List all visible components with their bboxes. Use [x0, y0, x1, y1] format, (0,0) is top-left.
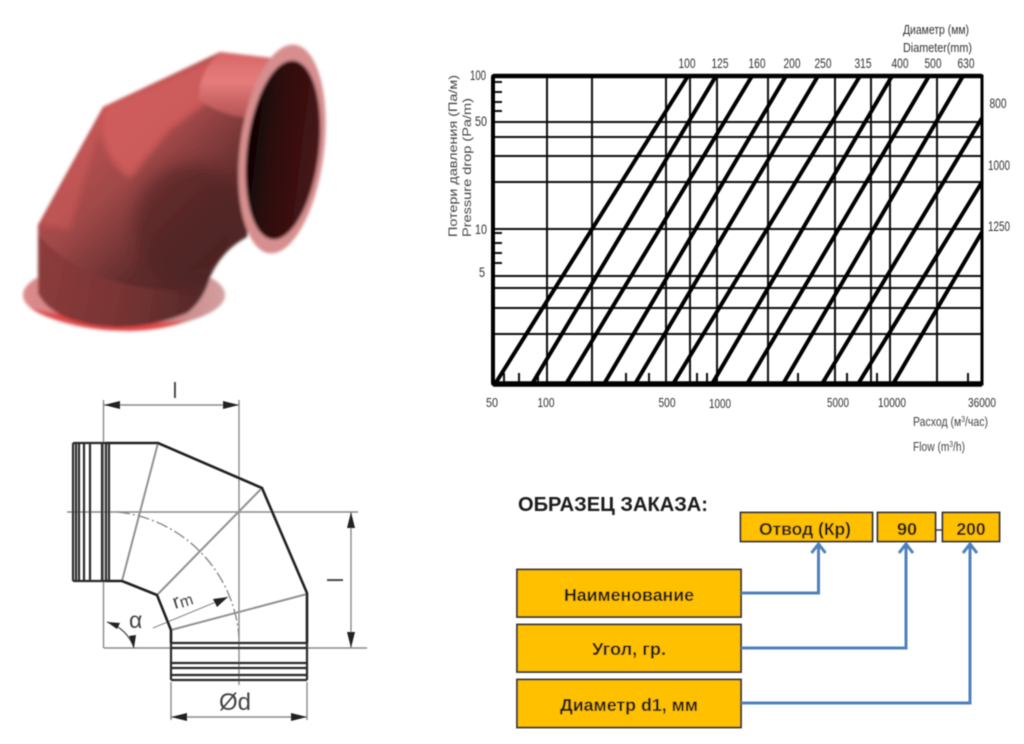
x axis title: 3	[949, 440, 953, 449]
bottom collar	[170, 643, 308, 680]
photo: red steel elbow	[20, 40, 336, 340]
y axis labels: 50	[475, 114, 487, 129]
pressure drop chart	[446, 23, 1010, 454]
order example	[517, 494, 1000, 728]
x axis title: Flow (m	[913, 440, 957, 454]
x axis title: Расход (м	[913, 415, 970, 429]
x axis title: /h)	[953, 440, 965, 454]
box: 200	[942, 512, 1000, 542]
middle segment highlight	[100, 55, 220, 178]
diameter labels top: 315	[854, 56, 872, 71]
lower segment shading	[38, 236, 189, 326]
box: Диаметр	[517, 680, 741, 728]
x axis title	[913, 415, 988, 454]
diameter labels top: 630	[958, 56, 974, 71]
x axis labels: 1000	[709, 396, 731, 411]
x axis labels: 50	[486, 395, 498, 410]
arrow: name to Отвод	[741, 544, 826, 593]
left collar	[73, 442, 109, 582]
diameter axis title	[903, 23, 972, 55]
diameter labels top: 400	[892, 56, 908, 71]
opening flange	[228, 40, 336, 258]
box: Отвод: Отвод (Кр)	[759, 519, 851, 539]
label diameter: Ød	[219, 689, 251, 716]
order heading: ОБРАЗЕЦ ЗАКАЗА:	[518, 494, 708, 516]
label radius: r	[170, 591, 183, 614]
box: Отвод	[740, 512, 872, 542]
box: Угол: Угол, гр.	[592, 639, 666, 659]
diameter axis title: Диаметр (мм)	[903, 23, 969, 37]
box: 90	[878, 512, 936, 542]
elbow outline	[106, 443, 307, 643]
thin dimension and centre lines	[67, 400, 367, 720]
x axis labels: 100	[538, 395, 554, 410]
y axis labels: 100	[470, 68, 486, 83]
grid	[493, 76, 982, 384]
x axis labels: 36000	[968, 395, 996, 410]
diameter labels top	[678, 56, 974, 71]
diameter labels top: 160	[748, 56, 766, 71]
diameter labels top: 100	[678, 56, 696, 71]
label radius: m	[178, 591, 196, 612]
box: Наименование: Наименование	[564, 585, 694, 605]
y axis title: Pressure drop (Pa/m)	[460, 98, 474, 237]
y axis title	[446, 75, 474, 237]
dimension arrowheads	[104, 401, 355, 721]
arrow: diameter to 200	[741, 544, 977, 703]
dimension label l top: l	[173, 378, 177, 403]
box: Наименование	[517, 570, 741, 617]
y axis labels: 10	[475, 222, 487, 237]
y axis title: Потери давления (Па/м)	[446, 75, 460, 237]
box: Диаметр: Диаметр d1, мм	[560, 695, 698, 715]
x axis title: 3	[961, 415, 965, 424]
right diameter labels: 1250	[988, 219, 1010, 234]
technical drawing of the elbow	[67, 378, 367, 721]
diameter lines	[495, 76, 982, 384]
tick marks	[493, 82, 968, 384]
left edge highlight	[41, 126, 97, 230]
y axis labels: 5	[479, 265, 485, 280]
diameter axis title: Diameter(mm)	[903, 41, 972, 55]
dimension label l right: l	[322, 578, 347, 582]
y axis labels	[470, 68, 487, 280]
diameter labels top: 125	[712, 56, 728, 71]
diameter labels top: 200	[784, 56, 800, 71]
separator dash	[936, 529, 942, 531]
diameter labels top: 500	[924, 56, 942, 71]
lower-right shadow	[135, 165, 245, 285]
label angle: α	[129, 607, 142, 633]
x axis labels: 5000	[827, 395, 849, 410]
bottom flange	[23, 261, 225, 329]
opening interior	[236, 56, 330, 244]
x axis labels: 10000	[878, 395, 906, 410]
arrow: angle to 90	[741, 544, 913, 648]
elbow body	[35, 50, 272, 329]
x axis labels: 500	[658, 395, 676, 410]
x axis title: /час)	[965, 415, 988, 429]
right diameter labels: 800	[990, 96, 1006, 111]
box: 200: 200	[956, 519, 986, 539]
box: 90: 90	[897, 519, 917, 539]
diameter labels top: 250	[814, 56, 832, 71]
right diameter labels	[988, 96, 1010, 234]
right diameter labels: 1000	[988, 158, 1010, 173]
top segment highlight	[199, 52, 272, 118]
x axis labels	[486, 395, 996, 411]
chart frame	[493, 76, 982, 384]
box: Угол	[517, 624, 741, 672]
